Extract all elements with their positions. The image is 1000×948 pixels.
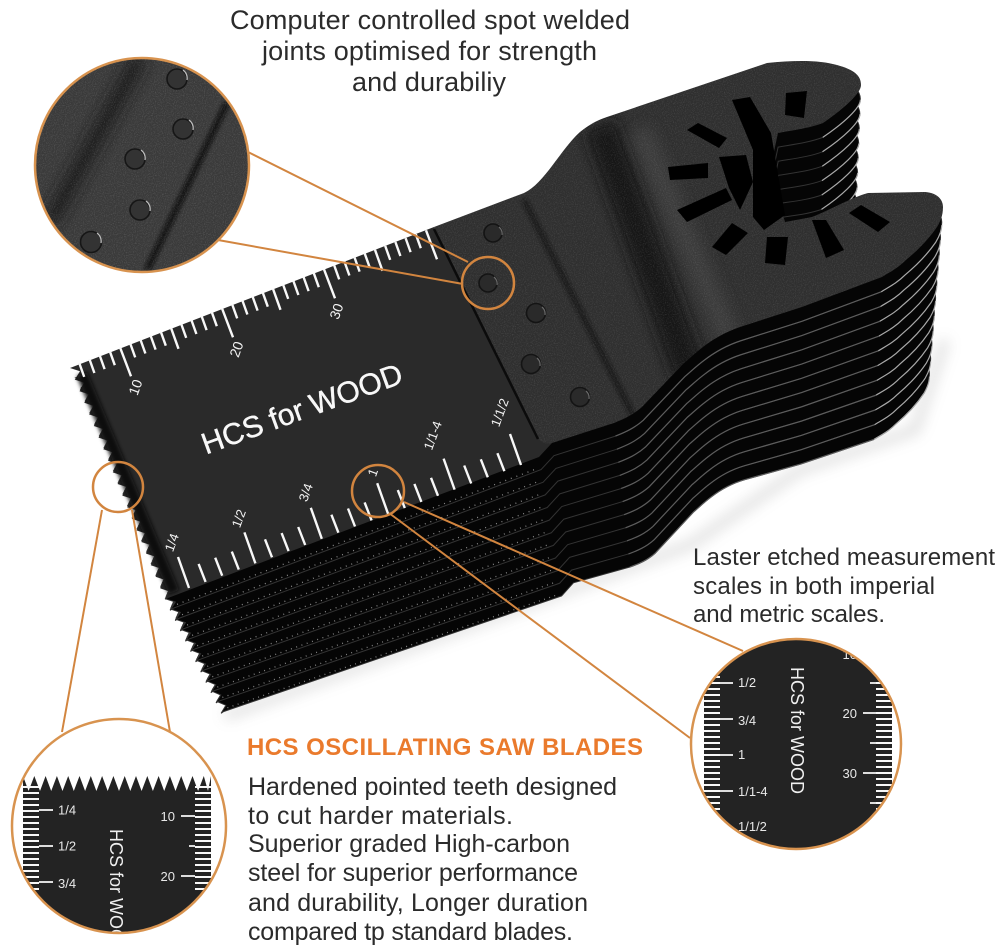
- top caption: spot welds: Computer controlled spot welded: [230, 5, 630, 35]
- marker circle: teeth: [93, 462, 143, 512]
- product description: to cut harder materials.: [248, 802, 513, 830]
- marker circle: scale: [352, 465, 404, 517]
- metric ruler labels: 30: [326, 301, 347, 321]
- zoom lens: scales: HCS for WOOD: [787, 667, 807, 794]
- right caption: measurement scales: and metric scales.: [693, 601, 885, 628]
- zoom lens: scales: 1/1-4: [738, 784, 768, 799]
- arbor slots: [668, 91, 890, 265]
- marker circle: rivet: [462, 257, 514, 309]
- stack shadow: [225, 340, 945, 716]
- metric ruler ticks: [79, 230, 437, 377]
- right caption: measurement scales: [693, 544, 995, 628]
- rivets: [479, 224, 590, 406]
- rivet highlights: [494, 227, 589, 399]
- zoom lens: scales: 20: [843, 706, 857, 721]
- right caption: measurement scales: Laster etched measurement: [693, 544, 995, 571]
- zoom lens: scales: [691, 630, 901, 855]
- product description: and durability, Longer duration: [248, 889, 588, 917]
- zoom lens: teeth: [12, 719, 226, 948]
- zoom lens: scales: 10: [843, 647, 857, 662]
- callout lines: teeth: [62, 510, 170, 732]
- imperial ruler labels: [162, 396, 512, 554]
- top blade with ruler face: [70, 227, 552, 600]
- right caption: measurement scales: scales in both imperial: [693, 573, 935, 600]
- zoom lens: teeth: 10: [161, 809, 175, 824]
- imperial ruler labels: 1/1/2: [488, 396, 512, 429]
- zoom lens: scales: 1/2: [738, 675, 756, 690]
- zoom lens: scales: 3/4: [738, 713, 756, 728]
- imperial ruler labels: 1: [364, 466, 381, 478]
- product heading: HCS OSCILLATING SAW BLADES: [247, 734, 643, 761]
- imperial ruler labels: 1/1-4: [421, 419, 445, 452]
- imperial ruler labels: 1/4: [162, 531, 182, 554]
- zoom lens: scales: 1: [738, 747, 745, 762]
- zoom lens: teeth: 1/2: [58, 838, 76, 854]
- callout lines: scale: [389, 502, 743, 738]
- metric ruler labels: [125, 301, 347, 397]
- product description: [248, 773, 617, 946]
- callout lines: spot weld: [218, 152, 468, 284]
- product description: Hardened pointed teeth designed: [248, 773, 617, 801]
- zoom lens: scales: 1/1/2: [738, 819, 767, 834]
- product description: Superior graded High-carbon: [248, 830, 570, 858]
- metric ruler labels: 20: [226, 339, 247, 359]
- product description: steel for superior performance: [248, 859, 578, 887]
- imperial ruler ticks: [178, 434, 521, 588]
- zoom lens: teeth: 20: [161, 869, 175, 884]
- zoom lens: teeth: 1/4: [58, 802, 76, 818]
- zoom lens: scales: 30: [843, 766, 857, 781]
- top caption: spot welds: joints optimised for strength: [261, 36, 597, 66]
- top caption: spot welds: [230, 5, 630, 97]
- blade stack: [76, 71, 942, 767]
- zoom lens: teeth: 3/4: [58, 876, 76, 891]
- imperial ruler labels: 3/4: [296, 481, 316, 504]
- mounting plate: [430, 55, 950, 450]
- imperial ruler labels: 1/2: [229, 507, 249, 530]
- zoom lens: spot welds: [35, 58, 249, 272]
- metric ruler labels: 10: [125, 377, 146, 397]
- blade label: HCS for WOOD: [197, 358, 407, 461]
- product description: compared tp standard blades.: [248, 918, 573, 946]
- top caption: spot welds: and durabiliy: [352, 67, 506, 97]
